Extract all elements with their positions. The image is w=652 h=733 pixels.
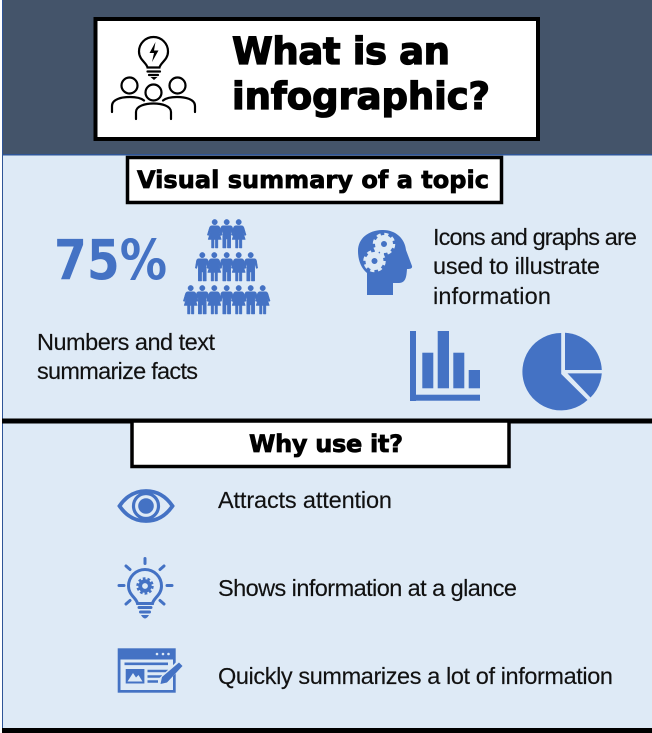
title box	[96, 19, 538, 139]
text: icons and graphs: used to illustrate	[433, 253, 600, 279]
title text	[232, 30, 490, 118]
icon: eye	[120, 491, 172, 521]
panel: header band	[2, 0, 652, 155]
text: numbers and text	[37, 329, 215, 384]
text: shows information: Shows information at a glance	[218, 575, 517, 601]
heading: why use it: Why use it?	[249, 430, 403, 458]
text: icons and graphs	[433, 224, 637, 309]
icon: light bulb with gear	[119, 558, 172, 618]
heading: visual summary	[128, 158, 502, 202]
text: icons and graphs: Icons and graphs are	[433, 224, 637, 250]
title text: infographic?	[232, 75, 490, 118]
heading: why use it	[132, 421, 509, 466]
text: numbers and text: summarize facts	[37, 358, 198, 384]
icon: people with light bulb	[112, 37, 195, 119]
heading: visual summary: Visual summary of a topic	[137, 166, 489, 194]
text: attracts attention: Attracts attention	[218, 487, 392, 513]
panel: visual summary background	[2, 154, 652, 420]
panel: why use it background	[2, 422, 652, 729]
text: icons and graphs: information	[433, 283, 551, 309]
title text: What is an	[232, 30, 450, 73]
icon: pyramid of people	[183, 219, 270, 314]
icon: bar chart	[410, 331, 480, 401]
icon: head with gears	[358, 230, 412, 295]
icon: pie chart	[522, 333, 602, 410]
text: quickly summarizes: Quickly summarizes a lot of information	[218, 663, 613, 689]
text: numbers and text: Numbers and text	[37, 329, 215, 355]
big number 75%: 75%	[54, 228, 167, 292]
icon: window with pencil	[118, 648, 182, 693]
